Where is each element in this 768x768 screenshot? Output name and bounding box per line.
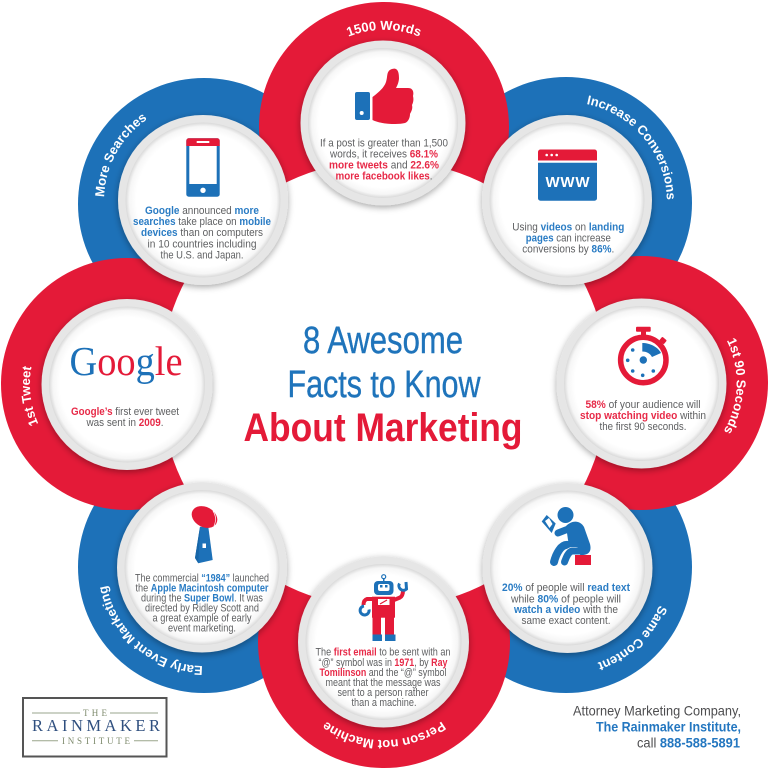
text: mobile searches fact (133, 205, 271, 261)
panel: same content (478, 481, 666, 670)
logo: The Rainmaker Institute (23, 698, 166, 756)
band: person not machine (258, 516, 510, 768)
band: 1st 90 seconds (514, 256, 768, 510)
band: early event marketing (78, 441, 330, 693)
label: 1500 Words: 1500 Words (346, 20, 421, 36)
text: same content fact (502, 582, 630, 627)
panel: person not machine (294, 554, 473, 748)
text: 1984 commercial fact: directed by Ridley Scott and (145, 603, 259, 615)
band: same content (440, 441, 692, 693)
logo: The Rainmaker Institute: INSTITUTE (62, 736, 130, 746)
text: 90 seconds fact: 58% of your audience will (586, 399, 700, 411)
text: 1500 words fact (320, 138, 448, 182)
text: contact details: The Rainmaker Institute, (596, 719, 741, 735)
text: first email fact: meant that the message was (326, 677, 441, 689)
logo: The Rainmaker Institute: THE (83, 708, 108, 718)
text: same content fact: while 80% of people will (510, 593, 621, 605)
text: first email fact: than a machine. (352, 697, 416, 709)
text: 1984 commercial fact: The commercial “1984” launched (135, 573, 269, 585)
icon: person reading (542, 507, 591, 565)
title (244, 320, 522, 450)
title: Facts to Know (288, 364, 481, 406)
text: first email fact: Tomilinson and the “@” symbol (320, 667, 446, 679)
label: 1st 90 Seconds: 1st 90 Seconds (724, 338, 746, 434)
text: first tweet fact: was sent in 2009. (86, 417, 164, 429)
text: contact details (573, 703, 741, 751)
text: contact details: Attorney Marketing Company, (573, 703, 741, 719)
icon: thumbs up (355, 69, 413, 124)
text: conversions fact: conversions by 86%. (522, 244, 614, 256)
text: 1500 words fact: more facebook likes. (336, 170, 432, 182)
text: first tweet fact (71, 406, 179, 429)
text: mobile searches fact: in 10 countries including (148, 238, 256, 250)
text: first email fact: “@” symbol was in 1971, by Ray (318, 657, 448, 669)
band: increase conversions (440, 77, 692, 329)
text: 1984 commercial fact: the Apple Macintosh computer (136, 583, 269, 595)
text: mobile searches fact: devices than on computers (141, 227, 263, 239)
band: more searches (78, 78, 330, 330)
label: 1st Tweet: 1st Tweet (22, 366, 38, 426)
label: Person not Machine: Person not Machine (324, 722, 446, 748)
text: first email fact (316, 647, 450, 709)
text: contact details: call 888-588-5891 (637, 735, 740, 751)
logo: The Rainmaker Institute: RAINMAKER (32, 716, 160, 735)
band: 1st tweet (1, 258, 253, 510)
title: 8 Awesome (303, 320, 463, 362)
text: 1500 words fact: more tweets and 22.6% (329, 160, 439, 172)
label: Same Content: Same Content (598, 606, 666, 670)
panel: increase conversions (478, 96, 674, 291)
band: 1500 words (259, 2, 509, 252)
label: More Searches: More Searches (95, 114, 146, 196)
text: mobile searches fact: Google announced more (145, 205, 259, 217)
text: first email fact: The first email to be sent with an (316, 647, 450, 659)
label: Increase Conversions: Increase Conversions (587, 96, 674, 200)
text: conversions fact: pages can increase (526, 233, 611, 245)
title: About Marketing (244, 406, 522, 450)
text: 1984 commercial fact (135, 573, 269, 635)
icon: Google logo: Google (70, 338, 182, 384)
panel: more searches (95, 114, 292, 291)
text: first tweet fact: Google’s first ever tweet (71, 406, 179, 418)
text: 1500 words fact: If a post is greater than 1,500 (320, 138, 448, 150)
icon: football trophy (188, 502, 221, 563)
text: mobile searches fact: searches take place on mobile (133, 216, 271, 228)
panel: early event marketing (100, 480, 291, 675)
panel: 1st tweet (22, 297, 216, 476)
label: Early Event Marketing: Early Event Marketing (100, 586, 202, 675)
text: same content fact: watch a video with the (513, 604, 618, 616)
text: first email fact: sent to a person rather (338, 687, 429, 699)
icon: browser window: WWW (546, 174, 590, 191)
text: same content fact: same exact content. (522, 615, 610, 627)
text: 1984 commercial fact: event marketing. (168, 623, 236, 635)
text: 1984 commercial fact: a great example of early (152, 613, 252, 625)
icon: browser window (538, 150, 597, 201)
panel: 1st 90 seconds (552, 296, 746, 474)
text: 90 seconds fact: the first 90 seconds. (600, 421, 686, 433)
text: 90 seconds fact: stop watching video within (580, 410, 706, 422)
icon: smartphone (186, 138, 220, 197)
text: same content fact: 20% of people will read text (502, 582, 630, 594)
text: 90 seconds fact (580, 399, 706, 433)
text: conversions fact: Using videos on landing (512, 222, 624, 234)
icon: stopwatch (621, 327, 667, 383)
text: 1984 commercial fact: during the Super Bowl. It was (141, 593, 263, 605)
icon: robot (360, 575, 406, 641)
text: conversions fact (512, 222, 624, 256)
panel: 1500 words (296, 20, 470, 212)
text: 1500 words fact: words, it receives 68.1% (329, 148, 438, 160)
text: mobile searches fact: the U.S. and Japan. (160, 249, 244, 261)
